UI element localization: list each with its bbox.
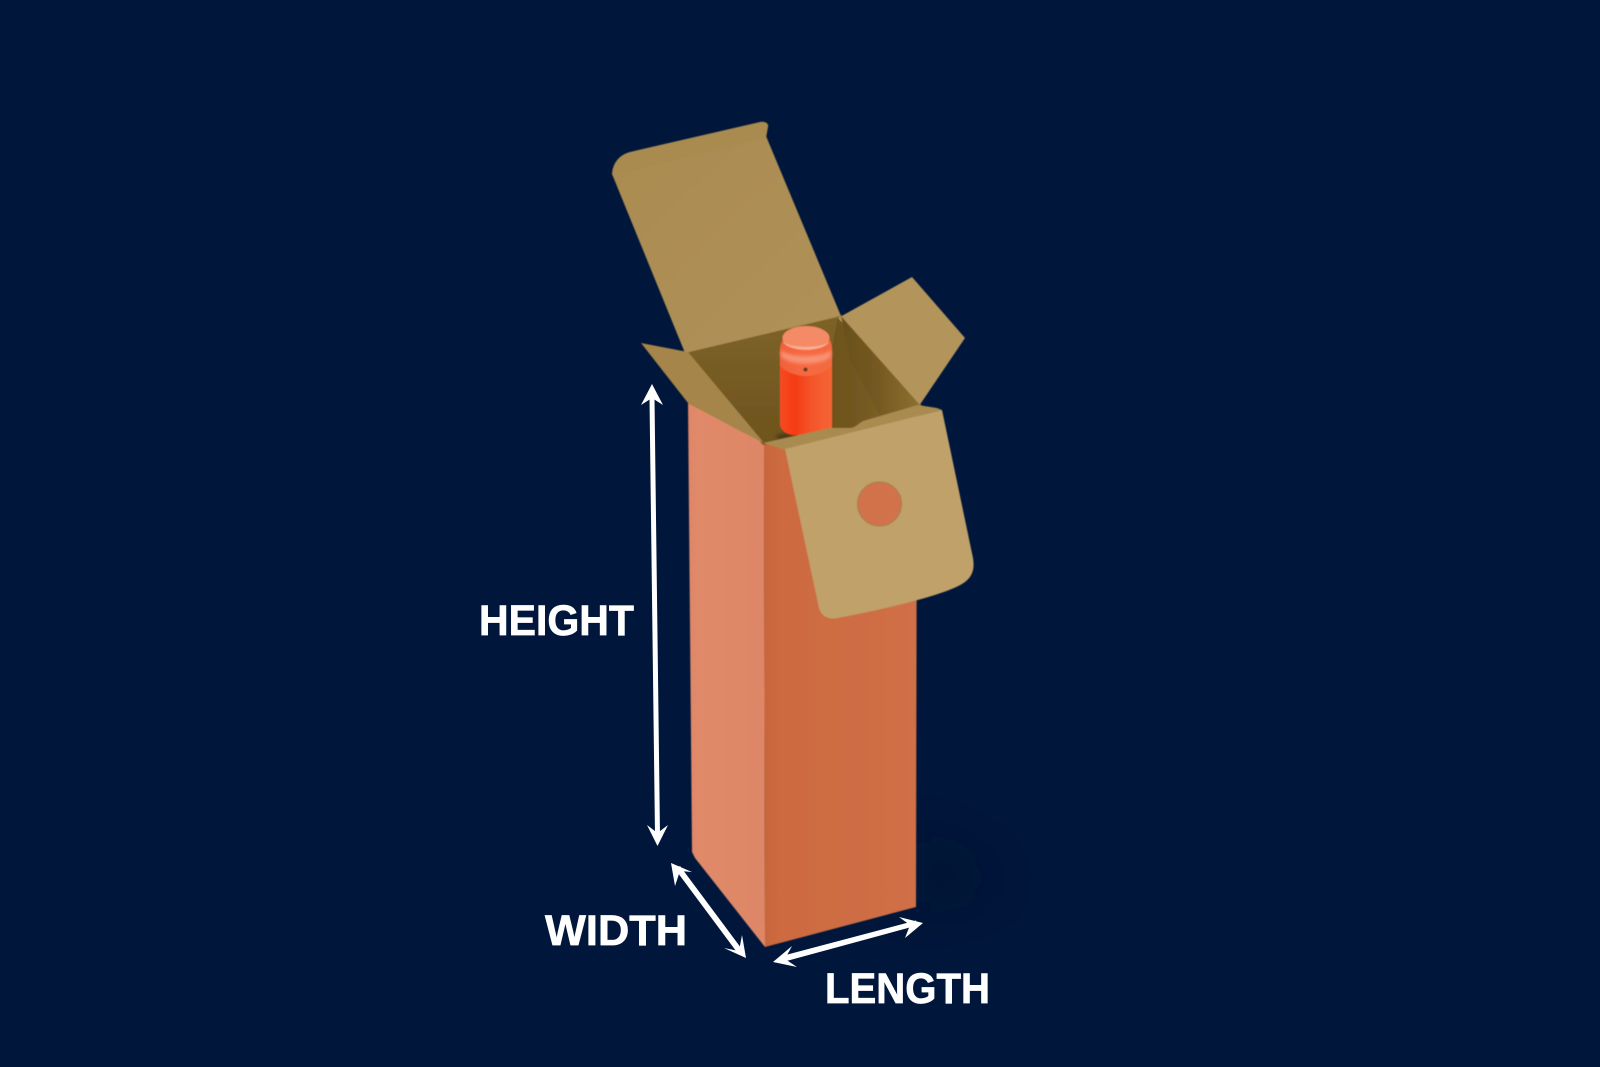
height shaft — [650, 398, 660, 835]
open lid — [612, 122, 841, 353]
length right arrowhead — [899, 917, 923, 938]
bottle vent dot — [804, 368, 808, 372]
front flap — [785, 410, 974, 619]
wine box — [612, 122, 974, 947]
lid panel — [612, 136, 841, 353]
bottle collar — [780, 339, 832, 376]
label: height: HEIGHT — [479, 597, 634, 645]
length arrow — [773, 917, 923, 967]
interior back wall edge repaint — [841, 316, 920, 416]
bottle cap rim — [782, 340, 830, 350]
bottle top — [776, 326, 832, 442]
box left face — [688, 403, 765, 947]
front flap fold band — [763, 405, 942, 450]
length shaft — [780, 920, 917, 962]
bottle shadow — [776, 432, 824, 442]
front flap hole — [858, 482, 902, 526]
left dust flap — [641, 343, 764, 443]
lid tuck tab — [612, 122, 768, 175]
bottle cap — [782, 326, 830, 350]
bottle collar highlight — [781, 350, 831, 364]
width bottom arrowhead — [724, 935, 746, 958]
width top arrowhead — [671, 863, 692, 886]
height top arrowhead — [641, 384, 663, 405]
width shaft — [675, 866, 744, 955]
height bottom arrowhead — [647, 825, 668, 846]
right dust flap — [838, 277, 965, 406]
length left arrowhead — [773, 946, 797, 967]
label: length: LENGTH — [825, 965, 990, 1013]
box right face — [764, 410, 917, 947]
label: width: WIDTH — [545, 907, 687, 955]
bottle neck and shoulder — [780, 350, 832, 435]
height arrow — [641, 384, 668, 846]
box cast shadow — [916, 835, 990, 906]
interior back wall — [686, 315, 850, 445]
width arrow — [671, 863, 746, 958]
interior right wall — [815, 316, 922, 440]
